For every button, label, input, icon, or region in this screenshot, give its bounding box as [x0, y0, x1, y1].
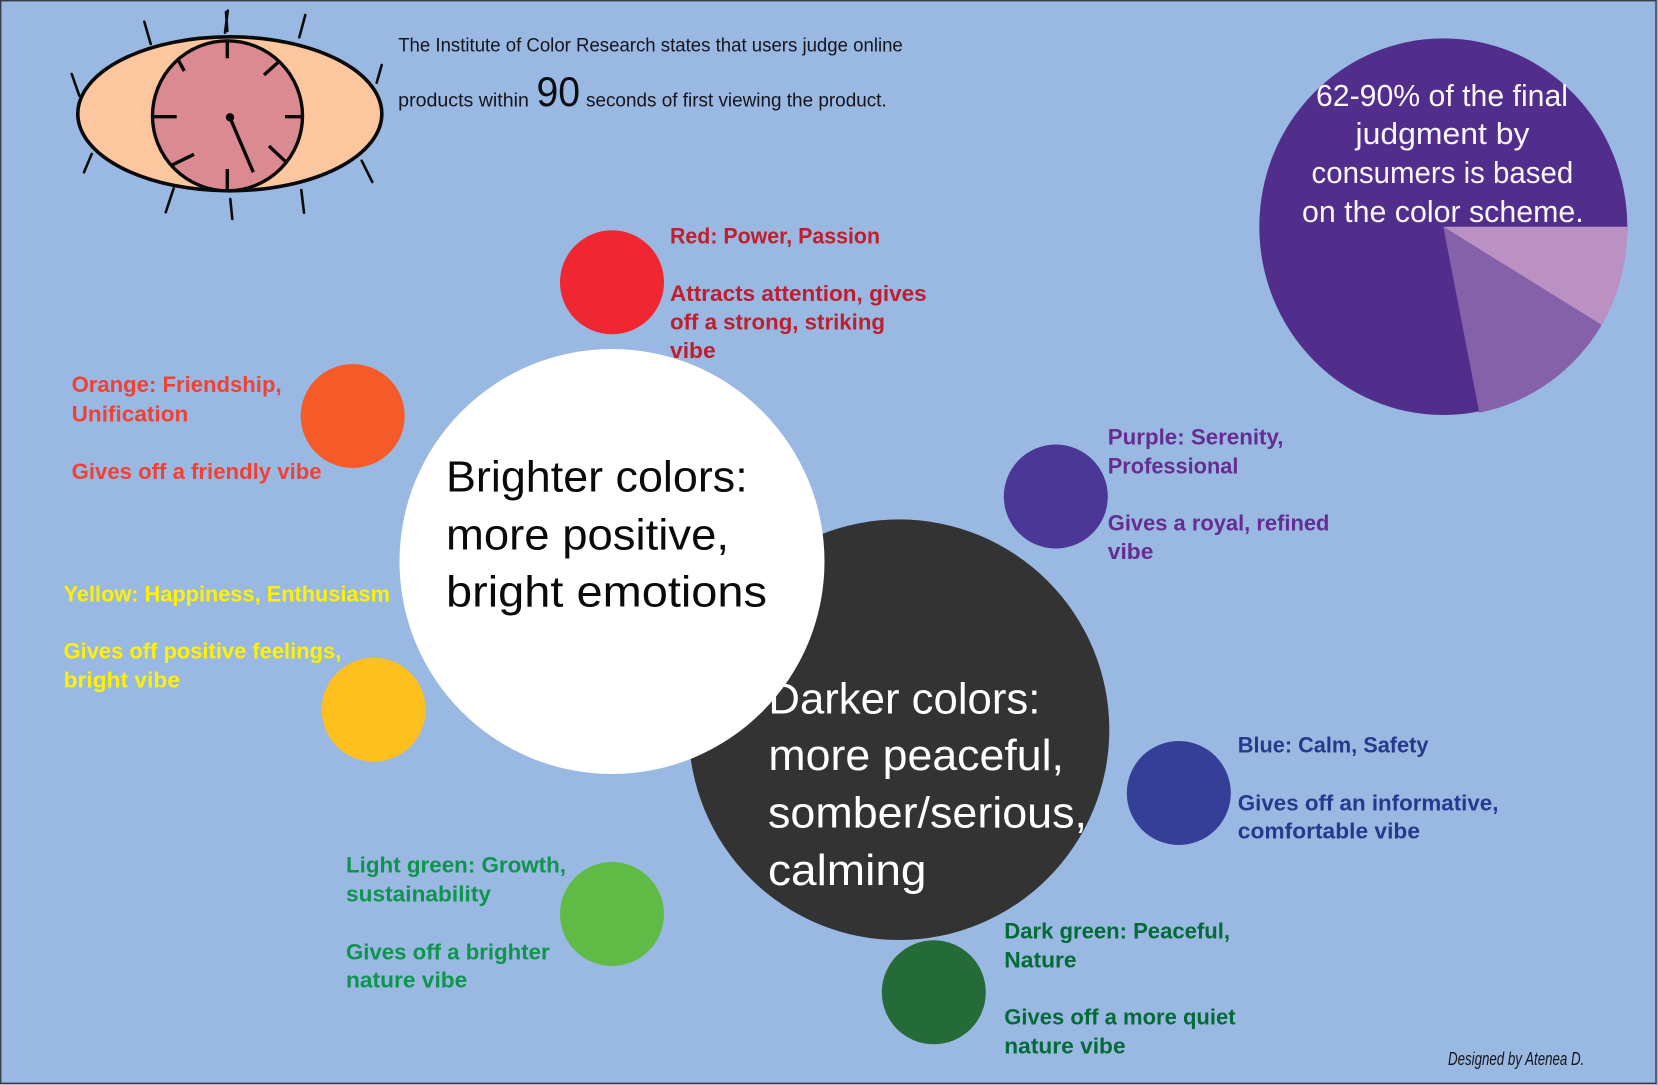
dark green text: nature vibe — [1004, 1033, 1126, 1058]
red text: vibe — [670, 338, 716, 363]
panel: darker colors circle: calming — [768, 846, 926, 895]
text: 90 seconds statement — [398, 36, 903, 115]
pie slices — [1259, 38, 1627, 415]
text: 90 seconds statement: products within — [398, 91, 529, 112]
yellow text: Gives off positive feelings, — [64, 638, 341, 663]
light green text — [346, 853, 566, 993]
light green circle — [560, 862, 664, 966]
text: 90 seconds statement: 90 — [536, 68, 580, 115]
purple text: Purple: Serenity, — [1108, 425, 1283, 450]
red text: Red: Power, Passion — [670, 224, 880, 249]
pie caption: consumers is based — [1312, 155, 1573, 190]
blue text: Blue: Calm, Safety — [1238, 733, 1429, 758]
panel: darker colors circle: Darker colors: — [768, 674, 1040, 723]
blue text: comfortable vibe — [1238, 819, 1420, 844]
orange text — [72, 372, 322, 484]
panel: light green — [346, 853, 664, 993]
panel: purple — [1004, 425, 1329, 564]
yellow circle — [322, 658, 426, 762]
pie caption: on the color scheme. — [1302, 194, 1584, 229]
pie caption: 62-90% of the final — [1316, 78, 1568, 113]
red text: Attracts attention, gives — [670, 281, 927, 306]
red circle — [560, 230, 664, 334]
panel: brighter colors circle: Brighter colors: — [446, 453, 748, 502]
light green text: sustainability — [346, 882, 491, 907]
panel: brighter colors circle — [400, 349, 824, 774]
yellow text — [64, 582, 390, 692]
purple text: Gives a royal, refined — [1108, 511, 1329, 536]
dark green text: Dark green: Peaceful, — [1004, 918, 1230, 943]
dark green text: Gives off a more quiet — [1004, 1004, 1236, 1029]
text: 90 seconds statement: seconds of first viewing the product. — [586, 91, 887, 112]
panel: dark green — [882, 918, 1236, 1058]
orange text: Orange: Friendship, — [72, 372, 282, 397]
pie chart: color scheme judgment — [1259, 38, 1627, 415]
dark green circle — [882, 940, 986, 1044]
blue text — [1238, 733, 1498, 844]
purple text: vibe — [1108, 539, 1153, 564]
orange circle — [301, 364, 405, 468]
panel: brighter colors circle: bright emotions — [446, 568, 767, 617]
panel: blue — [1127, 733, 1498, 845]
pie caption — [1302, 78, 1584, 229]
clock face — [152, 41, 302, 191]
light green text: Gives off a brighter — [346, 939, 550, 964]
orange text: Unification — [72, 402, 188, 427]
icon: eye with clock — [72, 11, 382, 219]
purple circle — [1004, 444, 1108, 548]
panel: darker colors circle — [689, 519, 1109, 940]
pie caption: judgment by — [1354, 116, 1530, 151]
eye outline — [78, 37, 382, 191]
yellow text: bright vibe — [64, 667, 180, 692]
panel: red — [560, 224, 927, 363]
blue text: Gives off an informative, — [1238, 791, 1498, 816]
dark green text: Nature — [1004, 947, 1077, 972]
panel: yellow — [64, 582, 426, 762]
panel: darker colors circle: more peaceful, — [768, 731, 1064, 780]
light green text: Light green: Growth, — [346, 853, 566, 878]
light green text: nature vibe — [346, 968, 467, 993]
panel: brighter colors circle: more positive, — [446, 510, 729, 559]
eye lashes — [72, 11, 382, 219]
red text: off a strong, striking — [670, 310, 885, 334]
purple text — [1108, 425, 1329, 564]
dark green text — [1004, 918, 1236, 1058]
text: 90 seconds statement: The Institute of Color Research states that users judge online — [398, 36, 903, 57]
panel: darker colors circle: somber/serious, — [768, 788, 1087, 837]
purple text: Professional — [1108, 454, 1238, 479]
red text — [670, 224, 927, 363]
panel: orange — [72, 364, 405, 484]
blue circle — [1127, 741, 1231, 845]
orange text: Gives off a friendly vibe — [72, 459, 322, 484]
credit: designer: Designed by Atenea D. — [1448, 1048, 1584, 1069]
yellow text: Yellow: Happiness, Enthusiasm — [64, 582, 390, 607]
